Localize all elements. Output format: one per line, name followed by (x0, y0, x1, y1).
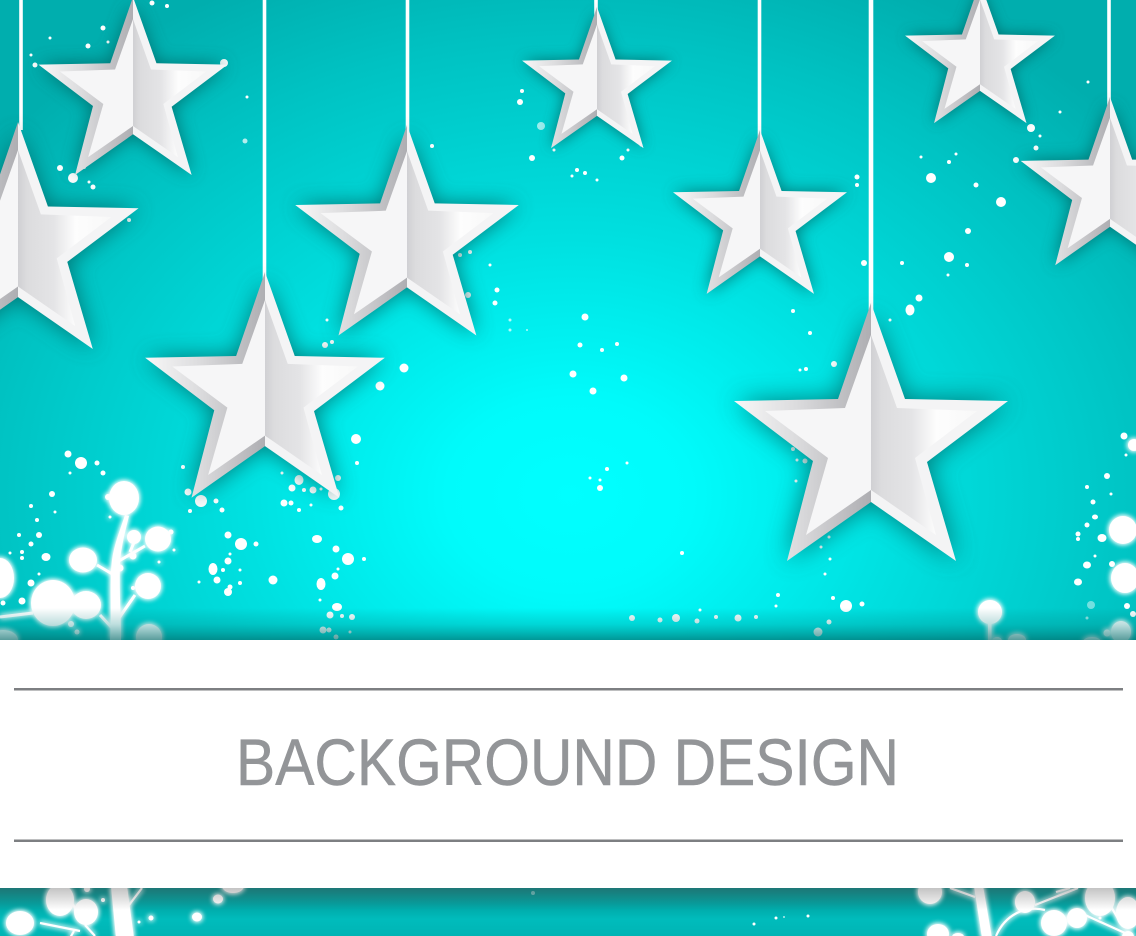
teal radial background (0, 0, 1136, 640)
star: small top right (905, 0, 1055, 123)
star: far right (1021, 97, 1136, 265)
star: medium centre right (673, 130, 847, 294)
star: small top centre (522, 7, 672, 148)
paint splatter dots (0, 0, 1136, 640)
bottom teal strip (0, 888, 1136, 936)
glowing tree: left (0, 481, 176, 650)
bottom left tree (1, 888, 248, 936)
star: largest right (734, 303, 1008, 561)
bottom right tree (914, 888, 1136, 936)
star: large left (145, 272, 385, 498)
ground shadow above panel (0, 608, 1136, 640)
title: background design: BACKGROUND DESIGN (236, 725, 899, 799)
glowing tree: right (978, 439, 1136, 647)
star: far left (0, 122, 139, 349)
hanging strings (21, 0, 1109, 320)
star: medium centre left (295, 125, 519, 336)
white title panel (0, 640, 1136, 888)
bottom strip dots (531, 891, 810, 926)
star: top left (38, 0, 228, 175)
